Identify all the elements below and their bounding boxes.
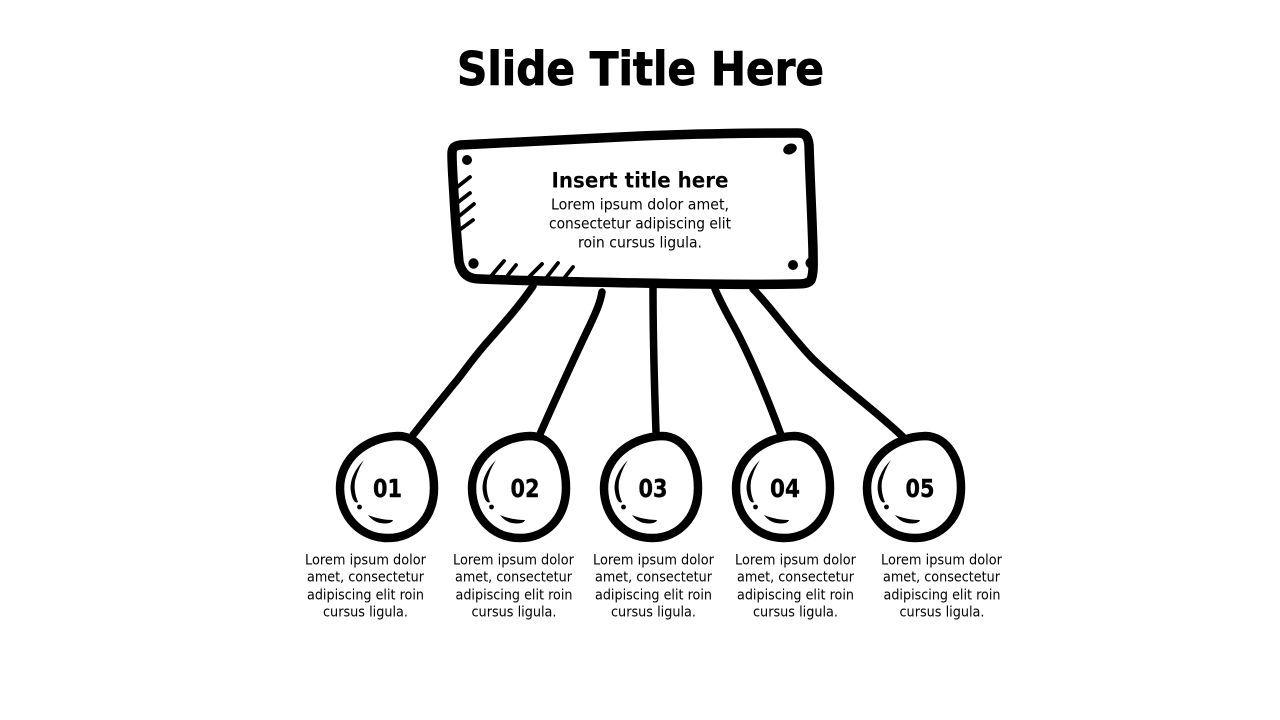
bubble 02 (472, 436, 566, 538)
number 03: 03 (638, 474, 668, 503)
number 02: 02 (510, 474, 540, 503)
number 04: 04 (770, 474, 800, 503)
box body text: roin cursus ligula. (578, 234, 702, 252)
box outline (452, 133, 813, 284)
item 05 (867, 436, 1002, 620)
title: Slide Title Here (457, 42, 824, 96)
box heading: Insert title here (552, 168, 728, 192)
text 02: cursus ligula. (472, 604, 556, 620)
panel: title box (452, 133, 816, 284)
text 03: adipiscing elit roin (595, 588, 712, 604)
text 04: adipiscing elit roin (737, 588, 854, 604)
number 05: 05 (906, 474, 934, 503)
text 03: Lorem ipsum dolor (593, 552, 714, 568)
connector lines (413, 286, 903, 437)
text 04: Lorem ipsum dolor (735, 552, 856, 568)
text 01: cursus ligula. (323, 604, 408, 620)
box hatching (454, 177, 573, 277)
text 03 (593, 552, 714, 620)
text 01: adipiscing elit roin (307, 588, 424, 604)
text 01: Lorem ipsum dolor (305, 552, 426, 568)
text 05: amet, consectetur (883, 570, 1000, 586)
text 03: amet, consectetur (595, 570, 712, 586)
text 05: cursus ligula. (900, 604, 984, 620)
box corner dots (462, 142, 816, 270)
number 01: 01 (373, 474, 402, 503)
box body text (549, 196, 731, 252)
bubble 04 (736, 436, 830, 538)
text 02: adipiscing elit roin (456, 588, 572, 604)
text 02: Lorem ipsum dolor (453, 552, 574, 568)
box body text: consectetur adipiscing elit (549, 214, 731, 232)
text 05: Lorem ipsum dolor (881, 552, 1002, 568)
item 04 (735, 436, 856, 620)
text 04: amet, consectetur (737, 570, 854, 586)
text 05 (881, 552, 1002, 620)
text 01: amet, consectetur (307, 570, 424, 586)
bubble 03 (604, 436, 698, 538)
bubble 05 (867, 436, 961, 538)
text 01 (305, 552, 426, 620)
text 04: cursus ligula. (753, 604, 838, 620)
item 01 (305, 436, 434, 620)
bubble 01 (340, 436, 434, 538)
text 05: adipiscing elit roin (884, 588, 1000, 604)
box body text: Lorem ipsum dolor amet, (551, 196, 729, 214)
text 04 (735, 552, 856, 620)
item 03 (593, 436, 714, 620)
text 03: cursus ligula. (611, 604, 696, 620)
item 02 (453, 436, 574, 620)
text 02 (453, 552, 574, 620)
text 02: amet, consectetur (455, 570, 572, 586)
